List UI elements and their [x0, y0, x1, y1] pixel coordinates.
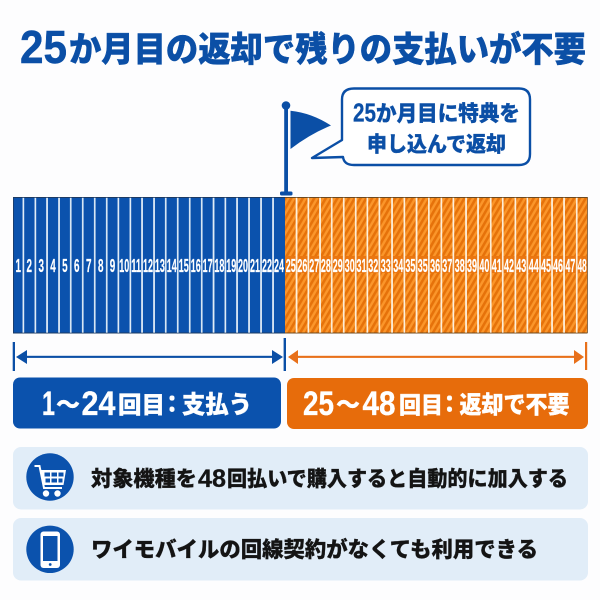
segment: paid installments: [13, 197, 285, 334]
segment: paid installments: 10: [119, 255, 129, 276]
segment: paid installments: 21: [250, 255, 260, 276]
segment: waived installments: 45: [541, 255, 551, 276]
segment: waived installments: 38: [455, 255, 465, 276]
segment: waived installments: 47: [565, 255, 575, 276]
segment: waived installments: 42: [504, 255, 514, 276]
segment: waived installments: 43: [516, 255, 526, 276]
segment: paid installments: 13: [155, 255, 165, 276]
callout: apply and return at month 25: 25: [353, 98, 376, 128]
label: installments 1 to 24, pay: 回目: [118, 386, 165, 420]
segment: paid installments: 15: [179, 255, 189, 276]
text: purchase note: 回払いで購入すると自動的に加入する: [227, 463, 568, 493]
icon: smartphone: [26, 526, 74, 573]
segment: paid installments: 7: [86, 255, 91, 276]
segment: waived installments: 31: [356, 255, 366, 276]
bar: 48 payment cells: [13, 197, 588, 334]
segment: paid installments: 12: [143, 255, 153, 276]
arrow: months 1 to 24 span: [13, 338, 286, 371]
segment: waived installments: 25: [286, 255, 296, 276]
segment: paid installments: 8: [98, 255, 103, 276]
segment: waived installments: 33: [381, 255, 391, 276]
segment: paid installments: 22: [262, 255, 272, 276]
segment: paid installments: 9: [110, 255, 115, 276]
label: installments 25 to 48, return and pay nothing: 回目: [399, 386, 443, 420]
segment: waived installments: 26: [297, 255, 307, 276]
segment: waived installments: 46: [553, 255, 563, 276]
callout: apply and return at month 25: 申し込んで返却: [367, 128, 506, 158]
segment: waived installments: 44: [529, 255, 539, 276]
segment: waived installments: 35: [405, 255, 415, 276]
label: installments 1 to 24, pay: 支払う: [182, 386, 252, 421]
segment: paid installments: 11: [131, 255, 141, 276]
segment: waived installments: 28: [321, 255, 331, 276]
text: purchase note: [91, 463, 568, 493]
text: no contract note: ワイモバイルの回線契約がなくても利用できる: [91, 533, 538, 564]
segment: paid installments: 2: [27, 255, 32, 276]
segment: paid installments: 19: [226, 255, 236, 276]
segment: waived installments: 32: [368, 255, 378, 276]
segment: waived installments: 41: [492, 255, 502, 276]
text: purchase note: 48: [198, 465, 226, 493]
panel: eligible purchase note: [13, 447, 588, 510]
label: installments 25 to 48, return and pay nothing: 25: [303, 385, 334, 423]
segment: waived installments: 35: [418, 255, 428, 276]
label: installments 1 to 24, pay: [13, 378, 281, 428]
segment: paid installments: 4: [50, 255, 56, 276]
icon: goal flag: [280, 101, 331, 196]
segment: waived installments: 36: [430, 255, 440, 276]
segment: paid installments: 20: [238, 255, 248, 276]
panel: no contract note: [13, 518, 588, 580]
segment: waived installments: 39: [467, 255, 477, 276]
label: installments 1 to 24, pay: 24: [82, 385, 116, 423]
segment: waived installments: 27: [309, 255, 319, 276]
segment: paid installments: 5: [62, 255, 68, 276]
icon: shopping cart: [26, 453, 74, 501]
segment: paid installments: 24: [274, 255, 284, 276]
segment: paid installments: 17: [203, 255, 213, 276]
label: installments 1 to 24, pay: 〜: [56, 385, 80, 420]
segment: waived installments: 37: [442, 255, 452, 276]
label: installments 1 to 24, pay: 1: [42, 385, 55, 423]
label: installments 25 to 48, return and pay nothing: ：: [438, 385, 461, 419]
segment: waived installments: 29: [333, 255, 343, 276]
label: installments 25 to 48, return and pay nothing: 〜: [336, 385, 360, 420]
segment: paid installments: 18: [214, 255, 224, 276]
segment: waived installments: 34: [393, 255, 404, 276]
arrow: months 25 to 48 span: [288, 342, 587, 370]
callout: apply and return at month 25: [312, 88, 530, 165]
text: 48: [578, 255, 587, 276]
title: 25: [20, 21, 67, 73]
segment: waived installments: 30: [345, 255, 355, 276]
segment: waived installments: [285, 197, 588, 334]
callout: apply and return at month 25: か月目に特典を: [376, 97, 520, 128]
segment: paid installments: 6: [74, 255, 79, 276]
text: purchase note: 対象機種を: [91, 463, 197, 493]
segment: paid installments: 3: [38, 255, 44, 276]
segment: paid installments: 14: [167, 255, 177, 276]
label: installments 25 to 48, return and pay nothing: 48: [362, 385, 396, 423]
label: installments 25 to 48, return and pay nothing: [287, 378, 588, 429]
label: installments 1 to 24, pay: ：: [160, 385, 184, 419]
segment: paid installments: 16: [191, 255, 201, 276]
segment: paid installments: 1: [15, 255, 21, 276]
segment: waived installments: 40: [479, 255, 489, 276]
label: installments 25 to 48, return and pay nothing: 返却で不要: [460, 385, 570, 420]
